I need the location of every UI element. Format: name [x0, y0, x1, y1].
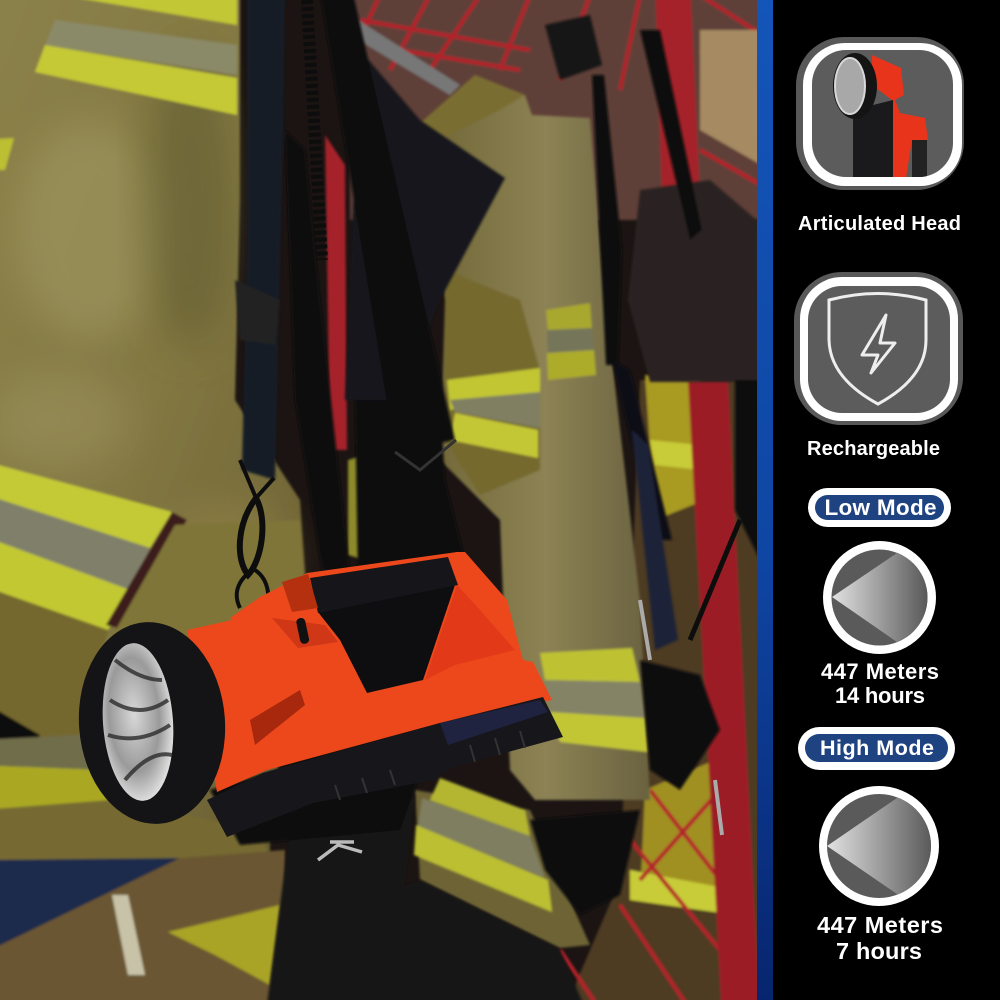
lantern handle window [318, 585, 455, 693]
text: high mode range and runtime: 7 hours [836, 938, 922, 964]
icon: low mode beam [823, 541, 936, 654]
text: high mode range and runtime [817, 912, 943, 964]
label: articulated head: Articulated Head [798, 213, 961, 235]
badge: high mode [798, 727, 955, 770]
straps and dark gear [210, 0, 780, 1000]
lantern switch recess [272, 618, 338, 648]
lantern side crease [250, 690, 305, 745]
strap clips and coil cord [237, 0, 740, 860]
lantern black base [207, 697, 563, 837]
panel: rechargeable icon [794, 272, 963, 425]
text: low mode range and runtime: 447 Meters [821, 659, 939, 684]
icon: lightning bolt [862, 315, 895, 373]
icon: high mode beam [819, 786, 939, 906]
lantern top handle [310, 557, 458, 613]
text: low mode range and runtime [821, 659, 939, 708]
text: low mode range and runtime: 14 hours [835, 683, 925, 708]
text: high mode range and runtime: 447 Meters [817, 912, 943, 938]
panel: articulated head icon [796, 37, 964, 190]
photo: firefighter gear with orange lantern [0, 0, 780, 1000]
lantern rubber bezel [78, 622, 226, 824]
badge: low mode [808, 488, 951, 527]
lantern reflector [102, 643, 174, 801]
icon: shield [829, 294, 926, 404]
lantern grip vents [282, 574, 318, 612]
jacket: central turnout coat [348, 75, 650, 948]
background: red equipment rack [325, 0, 780, 1000]
lantern orange housing [187, 552, 552, 792]
jacket: left turnout coat [0, 0, 310, 1000]
label: rechargeable: Rechargeable [807, 438, 940, 460]
lantern rear shade [425, 585, 515, 680]
blue divider bar [757, 0, 773, 1000]
orange lantern [72, 552, 563, 837]
badge: high mode: High Mode [820, 736, 934, 760]
badge: low mode: Low Mode [824, 495, 936, 520]
